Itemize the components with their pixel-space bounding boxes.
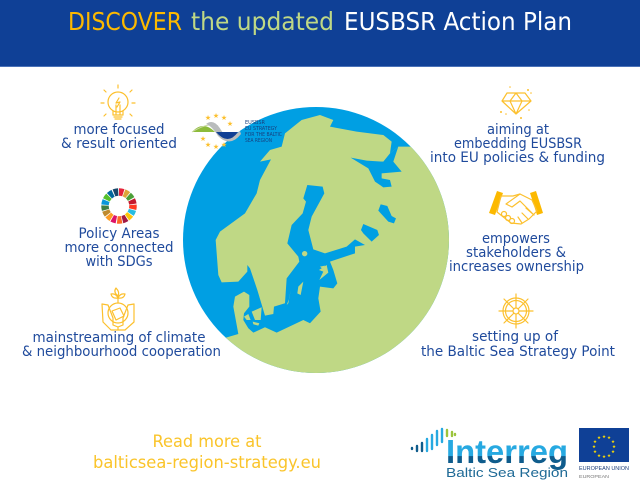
globe map of the Baltic Sea region: [183, 107, 449, 373]
EU flag: ★: [611, 439, 615, 445]
header banner: [0, 0, 640, 67]
EU flag: EUROPEAN: [579, 474, 609, 479]
text: setting up: [421, 329, 615, 360]
icon: handshake: [489, 191, 543, 224]
text: mainstreaming: [22, 330, 221, 360]
EU flag: ★: [612, 444, 616, 450]
EUSBSR logo: ★: [213, 112, 219, 120]
EUSBSR logo: ★: [205, 141, 211, 149]
text: mainstreaming: & neighbourhood cooperation: [22, 344, 221, 360]
text: aiming at: [430, 122, 605, 166]
EUSBSR logo: ★: [200, 135, 206, 143]
title: the updated: [191, 7, 334, 36]
EU flag: [579, 428, 629, 479]
EU flag: ★: [597, 453, 601, 459]
text: aiming at: aiming at: [487, 122, 549, 138]
text: more focused: [61, 122, 177, 152]
call to action link: Read more at: [152, 432, 262, 452]
EU flag: ★: [597, 435, 601, 441]
icon: light bulb: [101, 85, 135, 119]
EU flag: ★: [592, 444, 596, 450]
EU flag: ★: [607, 453, 611, 459]
EUSBSR logo: ★: [227, 120, 233, 128]
text: policy areas: [64, 226, 174, 270]
EUSBSR logo: SEA REGION: [245, 138, 272, 144]
EU flag: ★: [602, 434, 606, 440]
EUSBSR logo: [192, 112, 282, 151]
lakes: [361, 204, 396, 242]
islands: [244, 265, 328, 326]
text: more focused: & result oriented: [61, 136, 177, 152]
Interreg logo: [412, 429, 568, 480]
EUSBSR logo: ★: [205, 114, 211, 122]
EUSBSR logo: ★: [221, 114, 227, 122]
White Sea: [351, 147, 402, 187]
EU flag: ★: [602, 454, 606, 460]
text: aiming at: embedding EUSBSR: [454, 136, 582, 152]
title: [68, 7, 572, 36]
text: setting up: setting up of: [472, 329, 559, 345]
text: empowers: [449, 231, 584, 275]
text: more focused: more focused: [74, 122, 164, 138]
title: EUSBSR Action Plan: [344, 7, 572, 36]
text: policy areas: Policy Areas: [78, 226, 160, 242]
EU flag: ★: [611, 449, 615, 455]
text: setting up: the Baltic Sea Strategy Point: [421, 344, 615, 360]
EUSBSR logo: EU STRATEGY: [245, 126, 278, 132]
text: policy areas: with SDGs: [86, 254, 152, 270]
EUSBSR logo: ★: [213, 143, 219, 151]
text: empowers: empowers: [482, 231, 550, 247]
text: empowers: increases ownership: [449, 259, 584, 275]
icon: hands holding globe and plant: [102, 288, 134, 330]
EU flag: ★: [607, 435, 611, 441]
icon: SDG wheel: [99, 186, 139, 226]
Interreg logo: Interreg: [446, 433, 568, 470]
text: policy areas: more connected: [64, 240, 174, 256]
text: aiming at: into EU policies & funding: [430, 150, 605, 166]
call to action link: balticsea-region-strategy.eu: [93, 453, 321, 473]
EUSBSR logo: ★: [221, 141, 227, 149]
title: DISCOVER: [68, 7, 182, 36]
EUSBSR logo: FOR THE BALTIC: [245, 132, 282, 138]
text: mainstreaming: mainstreaming of climate: [32, 330, 206, 346]
EU flag: ★: [593, 439, 597, 445]
call to action link: [93, 432, 321, 473]
icon: diamond: [500, 86, 532, 119]
land: [216, 115, 449, 373]
EU flag: ★: [593, 449, 597, 455]
icon: ship wheel: [499, 294, 533, 328]
Interreg logo: Baltic Sea Region: [446, 465, 568, 480]
EUSBSR logo: EUSBSR: [245, 120, 265, 126]
EU flag: EUROPEAN UNION: [579, 466, 629, 472]
text: empowers: stakeholders &: [466, 245, 566, 261]
